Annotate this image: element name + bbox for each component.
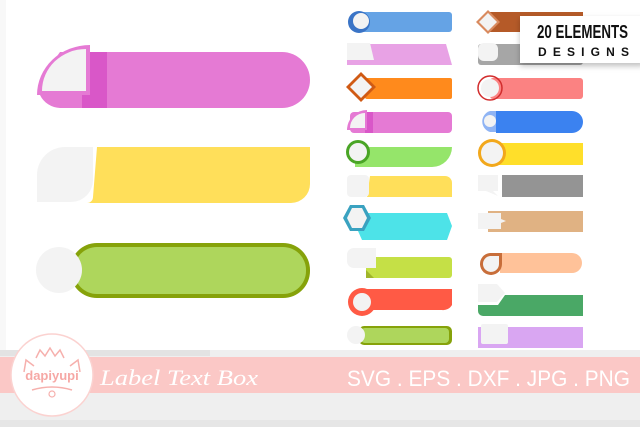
badge: 20 elements designs [520, 16, 640, 63]
small labels right column [476, 10, 583, 348]
label: cyan hexagon [343, 205, 452, 240]
label: lime [347, 248, 452, 278]
label: green circle [346, 140, 452, 167]
big label: green [36, 243, 310, 298]
label: yellow flower [478, 139, 583, 167]
label: pink quarter [347, 110, 452, 133]
label: peach drop [480, 253, 582, 275]
label: tan [478, 211, 583, 232]
label: orange diamond [346, 72, 452, 102]
banner: pink band [0, 357, 640, 393]
label: gray [478, 43, 583, 65]
label: olive green [347, 326, 452, 345]
logo: dapiyupi [25, 368, 79, 383]
badge: 20 elements designs: DESIGNS [538, 45, 629, 59]
big label: pink [37, 45, 310, 108]
label: lavender [478, 324, 583, 348]
label: pink slant [347, 43, 452, 65]
big label: yellow [37, 147, 310, 203]
banner title: Label Text Box [99, 365, 258, 390]
label: yellow [347, 175, 452, 197]
logo [11, 334, 93, 416]
label: gray box [478, 175, 583, 197]
label: red circle [348, 288, 452, 316]
small labels left column [343, 11, 452, 345]
label: salmon ring [478, 76, 583, 100]
background: wood bottom [0, 350, 640, 427]
label: green [478, 284, 583, 316]
label: blue circle [348, 11, 452, 33]
label: brown diamond [476, 10, 583, 34]
label: blue [482, 111, 583, 133]
formats: SVG . EPS . DXF . JPG . PNG [347, 366, 630, 391]
